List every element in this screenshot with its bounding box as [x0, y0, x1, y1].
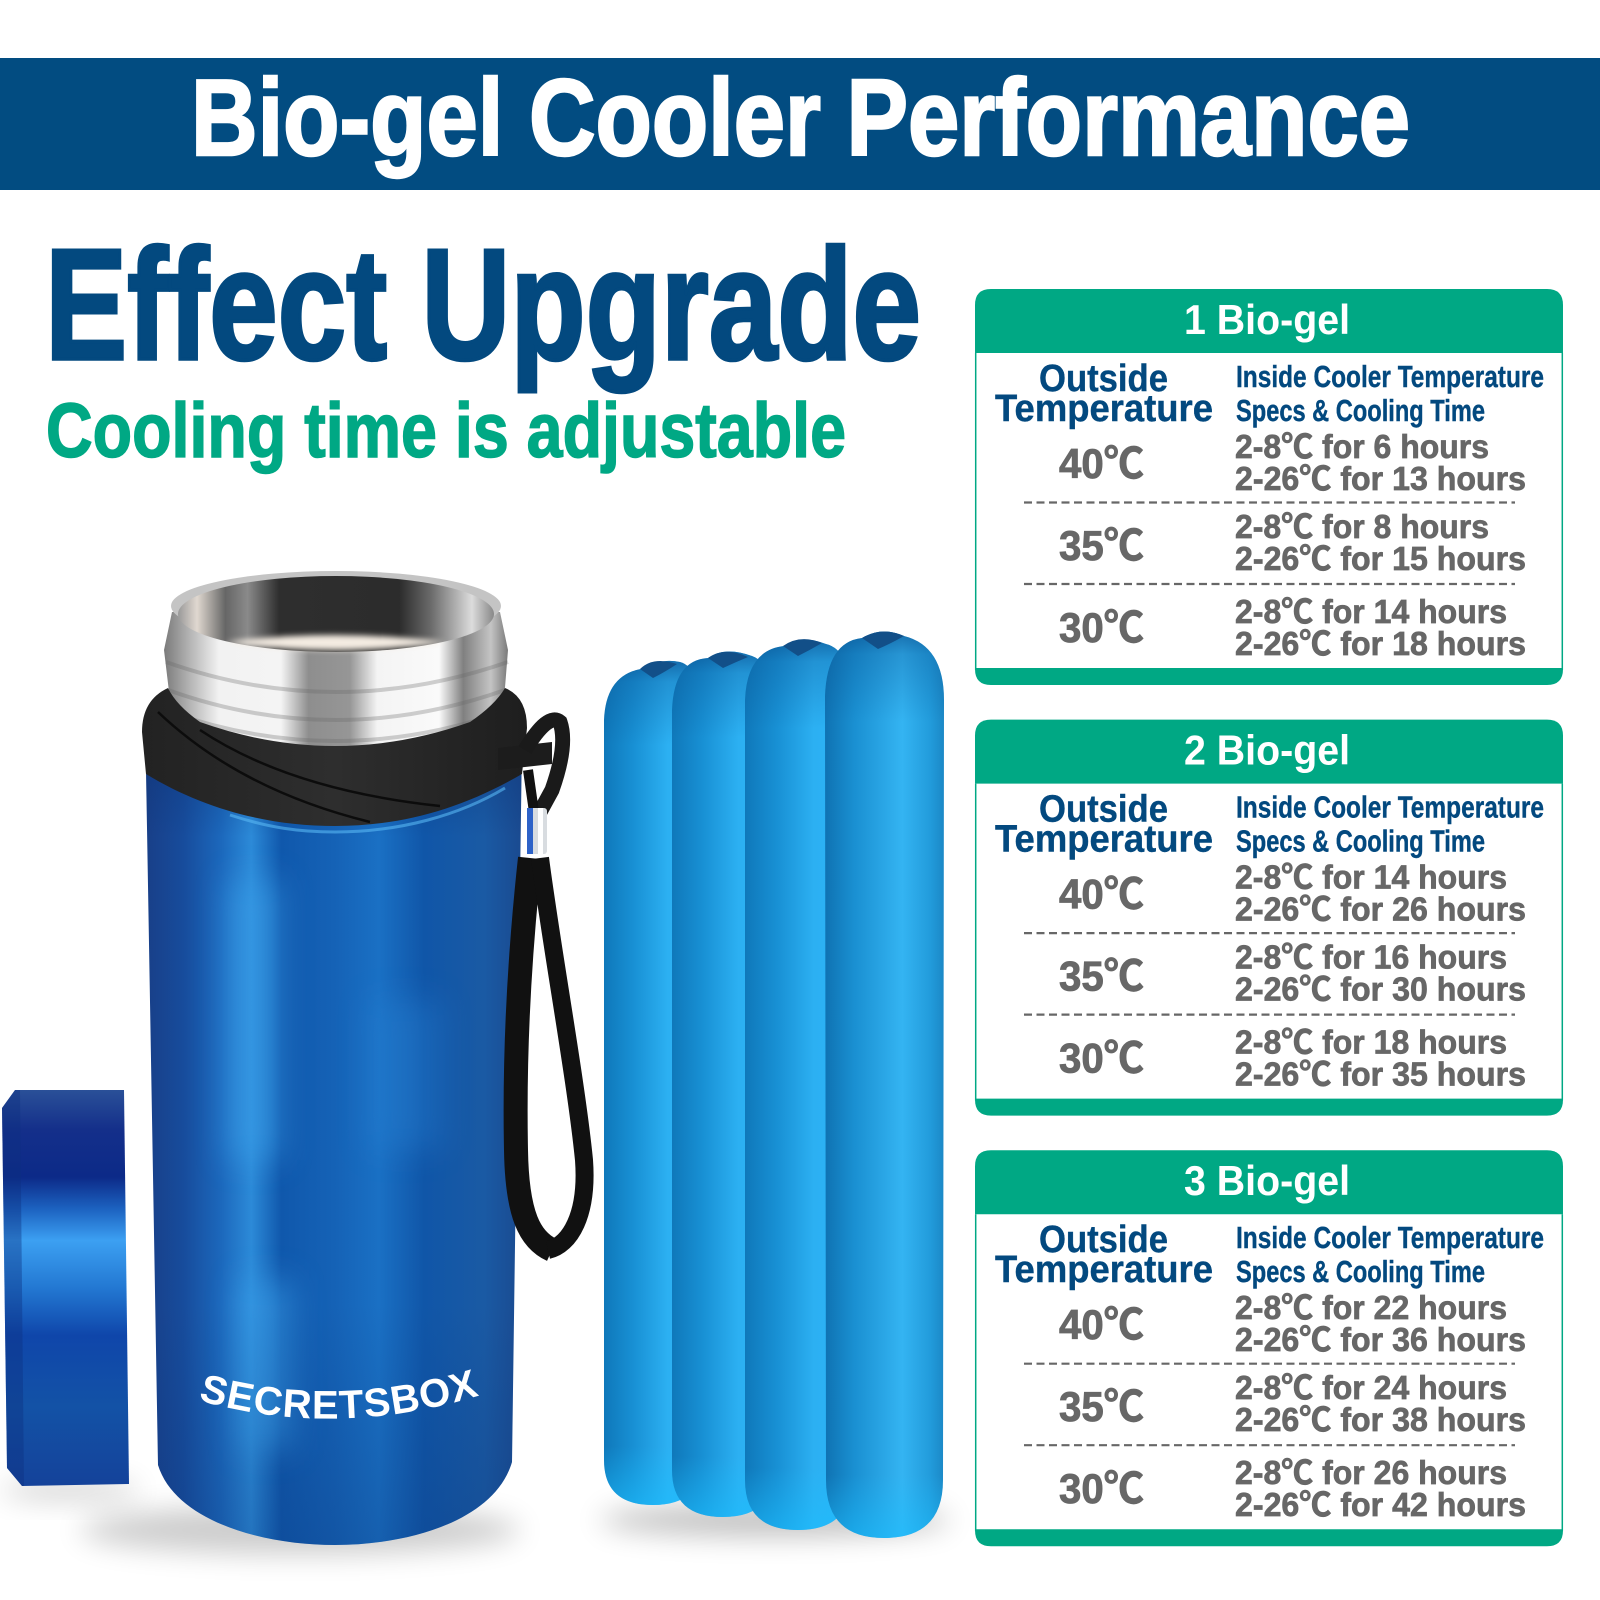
inside temperature header: Specs & Cooling Time — [1236, 824, 1485, 859]
row 30℃: 2-26℃ for 18 hours — [1235, 625, 1526, 662]
row 30℃ — [1059, 593, 1526, 662]
row 40℃: 40℃ — [1059, 871, 1144, 918]
inside temperature header: Specs & Cooling Time — [1236, 1254, 1485, 1289]
brand text: SECRETSBOX — [200, 1369, 479, 1419]
panel: 2 bio-gel — [975, 720, 1563, 1116]
row 40℃: 2-8℃ for 6 hours — [1235, 428, 1489, 465]
row 40℃: 40℃ — [1059, 1301, 1144, 1348]
panel: 3 bio-gel — [975, 1150, 1563, 1546]
row 40℃: 2-26℃ for 13 hours — [1235, 460, 1526, 497]
title: Bio-gel Cooler Performance — [191, 57, 1410, 179]
strap — [498, 720, 585, 1250]
row 35℃: 2-8℃ for 24 hours — [1235, 1369, 1507, 1406]
steel neck — [164, 571, 508, 760]
row 40℃ — [1059, 859, 1526, 928]
inside temperature header — [1236, 359, 1544, 428]
outside temperature header: Outside — [1039, 358, 1168, 400]
row 35℃: 35℃ — [1059, 953, 1144, 1000]
outside temperature header: Outside — [1039, 1219, 1168, 1261]
outside temperature header: Temperature — [995, 1249, 1213, 1291]
row 30℃: 30℃ — [1059, 604, 1144, 651]
row 35℃: 2-26℃ for 38 hours — [1235, 1401, 1526, 1438]
row 30℃ — [1059, 1024, 1526, 1093]
row 35℃: 2-26℃ for 15 hours — [1235, 540, 1526, 577]
row 30℃: 2-26℃ for 35 hours — [1235, 1056, 1526, 1093]
inside temperature header — [1236, 790, 1544, 859]
row 35℃ — [1059, 508, 1526, 577]
row 35℃: 2-26℃ for 30 hours — [1235, 971, 1526, 1008]
row 40℃: 2-8℃ for 14 hours — [1235, 859, 1507, 896]
product: lid — [2, 1090, 129, 1486]
outside temperature header: Outside — [1039, 789, 1168, 831]
subheading: cooling time: Cooling time is adjustable — [46, 388, 846, 474]
gel pack 3 — [745, 639, 851, 1530]
inside temperature header — [1236, 1220, 1544, 1289]
outside temperature header: Temperature — [995, 819, 1213, 861]
black collar — [142, 688, 527, 826]
row 40℃ — [1059, 1289, 1526, 1358]
outside temperature header — [995, 1219, 1213, 1291]
heading: effect upgrade: Effect Upgrade — [45, 217, 921, 393]
card heading: 1 Bio-gel — [1184, 296, 1350, 343]
product: bottle — [142, 571, 594, 1545]
gel pack 2 — [672, 651, 774, 1517]
row 40℃: 40℃ — [1059, 440, 1144, 487]
row 40℃ — [1059, 428, 1526, 497]
row 30℃: 2-8℃ for 26 hours — [1235, 1454, 1507, 1491]
row 35℃: 2-8℃ for 8 hours — [1235, 508, 1489, 545]
outside temperature header: Temperature — [995, 388, 1213, 430]
row 40℃: 2-8℃ for 22 hours — [1235, 1289, 1507, 1326]
card heading: 2 Bio-gel — [1184, 727, 1350, 774]
row 35℃: 2-8℃ for 16 hours — [1235, 939, 1507, 976]
strap clip — [527, 808, 547, 854]
outside temperature header — [995, 358, 1213, 430]
card heading: 3 Bio-gel — [1184, 1157, 1350, 1204]
panel: 1 bio-gel — [975, 289, 1563, 685]
outside temperature header — [995, 789, 1213, 861]
gel pack 1 — [604, 661, 702, 1505]
row 30℃: 30℃ — [1059, 1465, 1144, 1512]
row 35℃: 35℃ — [1059, 522, 1144, 569]
row 35℃: 35℃ — [1059, 1383, 1144, 1430]
row 30℃: 2-26℃ for 42 hours — [1235, 1486, 1526, 1523]
row 30℃: 30℃ — [1059, 1035, 1144, 1082]
row 40℃: 2-26℃ for 26 hours — [1235, 891, 1526, 928]
row 30℃: 2-8℃ for 18 hours — [1235, 1024, 1507, 1061]
row 35℃ — [1059, 1369, 1526, 1438]
body — [146, 740, 522, 1545]
gel pack 4 — [825, 631, 944, 1538]
row 40℃: 2-26℃ for 36 hours — [1235, 1321, 1526, 1358]
row 30℃: 2-8℃ for 14 hours — [1235, 593, 1507, 630]
row 30℃ — [1059, 1454, 1526, 1523]
inside temperature header: Specs & Cooling Time — [1236, 393, 1485, 428]
ground shadows — [0, 1480, 950, 1554]
title banner — [0, 57, 1600, 190]
row 35℃ — [1059, 939, 1526, 1008]
